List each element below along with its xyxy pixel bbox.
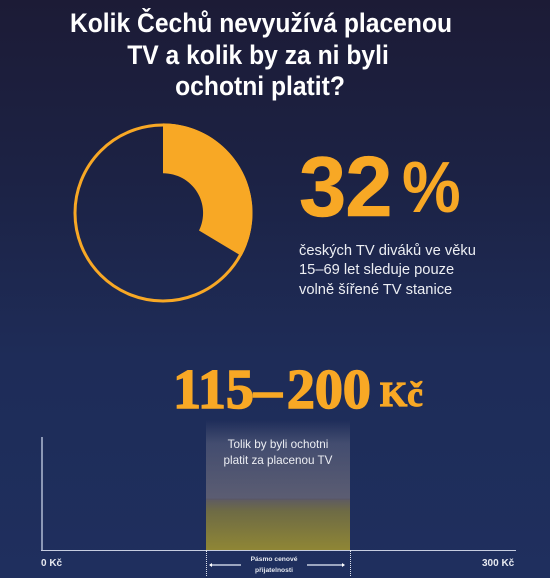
big number: price range: 115–200 xyxy=(173,359,371,421)
title: Kolik Čechů nevyužívá placenou xyxy=(70,8,452,38)
text: band label: Pásmo cenové xyxy=(251,556,297,563)
text: description of 32 percent: 15–69 let sleduje pouze xyxy=(299,262,454,278)
axis: vertical xyxy=(41,437,42,550)
arrow: right xyxy=(307,563,345,567)
text: band label: přijatelnosti xyxy=(255,566,293,574)
text: band label xyxy=(251,556,298,574)
chart: price acceptance band xyxy=(41,425,516,576)
band bracket: left dotted marker xyxy=(206,550,207,576)
axis: horizontal xyxy=(41,550,516,551)
text: band caption xyxy=(224,438,332,466)
title xyxy=(70,8,452,101)
pie chart: 32 percent xyxy=(74,123,252,302)
band: acceptance range xyxy=(206,420,350,550)
text: description of 32 percent xyxy=(299,242,476,298)
text: description of 32 percent: volně šířené TV stanice xyxy=(299,282,452,298)
title: TV a kolik by za ni byli xyxy=(127,40,389,70)
text: band caption: Tolik by byli ochotni xyxy=(228,438,328,451)
big number: percent sign: % xyxy=(402,146,461,228)
label: 0 Kč: 0 Kč xyxy=(41,558,62,569)
big number: 32: 32 xyxy=(299,140,392,235)
title: ochotni platit? xyxy=(175,71,345,101)
band bracket: right dotted marker xyxy=(350,550,351,576)
label: 300 Kč: 300 Kč xyxy=(482,558,514,569)
text: band caption: platit za placenou TV xyxy=(224,454,332,466)
big number: currency: Kč xyxy=(380,375,423,414)
arrow: left xyxy=(209,563,241,567)
text: description of 32 percent: českých TV diváků ve věku xyxy=(299,242,476,258)
